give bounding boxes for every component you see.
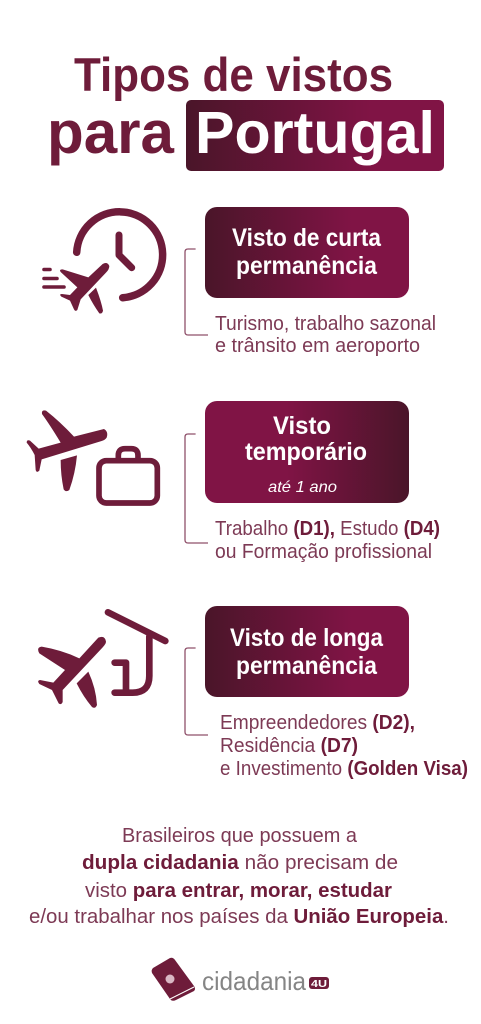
bracket [185, 648, 208, 735]
icon: clock with plane [44, 212, 163, 314]
description: Empreendedores (D2), [220, 712, 415, 734]
heading text line 2: permanência [236, 252, 378, 280]
wordmark: cidadania [202, 966, 307, 996]
title word: Portugal: Portugal [195, 100, 435, 166]
bracket [185, 434, 208, 543]
badge 4U [309, 977, 329, 989]
icon: passport [152, 958, 195, 1001]
plane [27, 410, 107, 491]
heading text line 2: permanência [236, 652, 378, 680]
plane [60, 263, 109, 314]
description line 2: ou Formação profissional [215, 541, 432, 563]
title word: para: para [47, 99, 175, 166]
panel: temporary [185, 401, 440, 563]
heading box [205, 401, 409, 503]
clock hands [119, 235, 132, 268]
heading text line 2: temporário [245, 438, 367, 466]
note line 1: Brasileiros que possuem a [122, 825, 358, 847]
title highlight box [186, 100, 444, 171]
badge text: 4U [311, 978, 327, 990]
heading box [205, 207, 409, 298]
closing note [29, 825, 449, 928]
description line 2: e trânsito em aeroporto [215, 335, 420, 357]
heading text: Visto [273, 412, 331, 440]
heading text: Visto de longa [230, 624, 384, 652]
plane [38, 637, 106, 708]
heading text: Visto de curta [232, 224, 382, 252]
bracket [185, 249, 208, 335]
note line 3: visto para entrar, morar, estudar [85, 880, 392, 902]
note line 2: dupla cidadania não precisam de [82, 852, 398, 874]
panel: short stay [185, 207, 436, 357]
house body [115, 637, 149, 693]
panel: long stay [185, 606, 468, 780]
description: Turismo, trabalho sazonal [215, 313, 436, 335]
heading box [205, 606, 409, 697]
suitcase [99, 449, 157, 503]
duration: até 1 ano [268, 479, 337, 496]
description: Trabalho (D1), Estudo (D4) [215, 518, 440, 540]
speed lines [44, 270, 64, 287]
clock arc [77, 212, 163, 298]
note line 4: e/ou trabalhar nos países da União Europeia. [29, 906, 449, 928]
description line 3: e Investimento (Golden Visa) [220, 758, 468, 780]
title [47, 48, 444, 171]
icon: plane and house [38, 612, 165, 708]
description line 2: Residência (D7) [220, 735, 358, 757]
roof [108, 612, 165, 641]
icon: plane and suitcase [27, 410, 157, 503]
logo [152, 958, 329, 1001]
title line 1: Tipos de vistos [74, 48, 393, 101]
